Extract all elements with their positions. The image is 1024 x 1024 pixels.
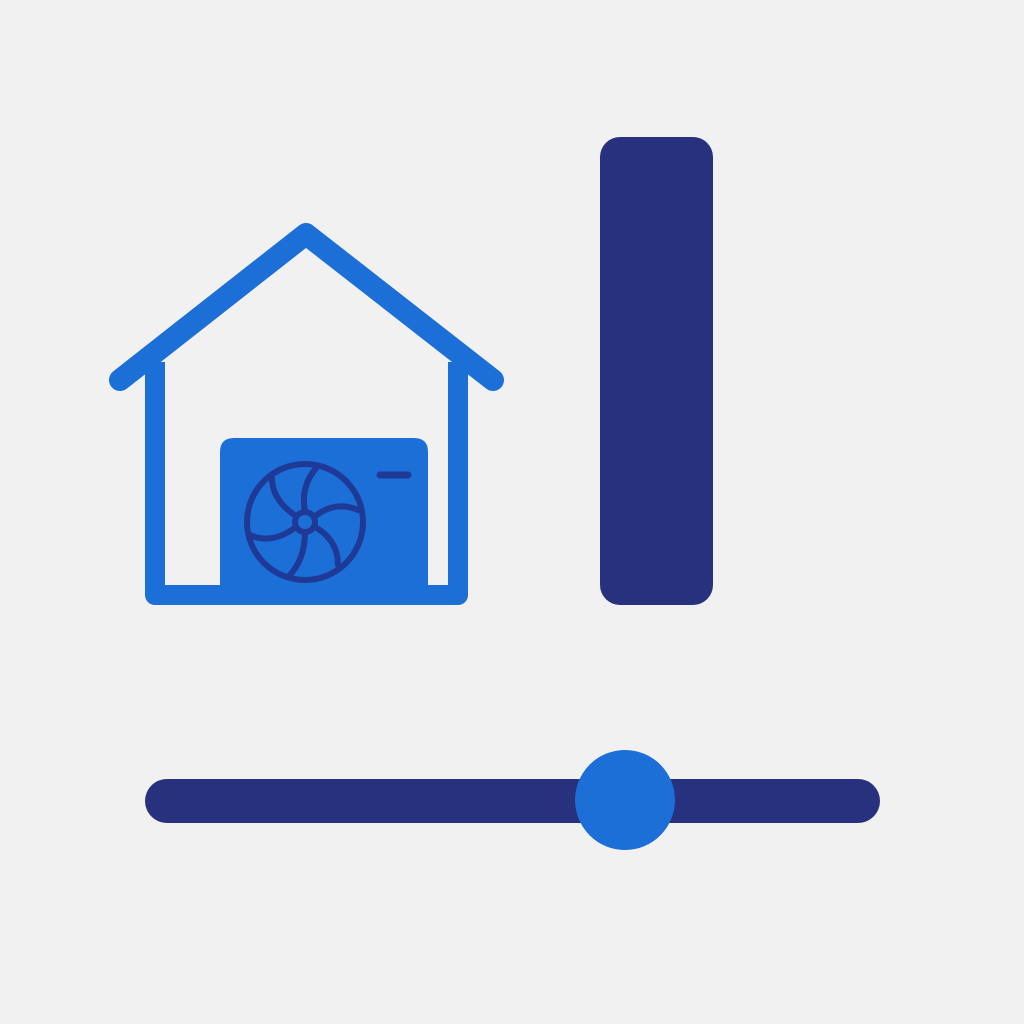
- bar: [600, 137, 713, 605]
- fan: [247, 464, 363, 580]
- slider: [167, 750, 858, 850]
- icon: house with heat pump: [120, 234, 493, 595]
- slider track: [167, 779, 858, 823]
- house walls: [155, 362, 458, 595]
- house roof: [120, 234, 493, 380]
- slider knob: [575, 750, 675, 850]
- heat pump unit: [220, 438, 428, 595]
- vent slot: [380, 472, 408, 478]
